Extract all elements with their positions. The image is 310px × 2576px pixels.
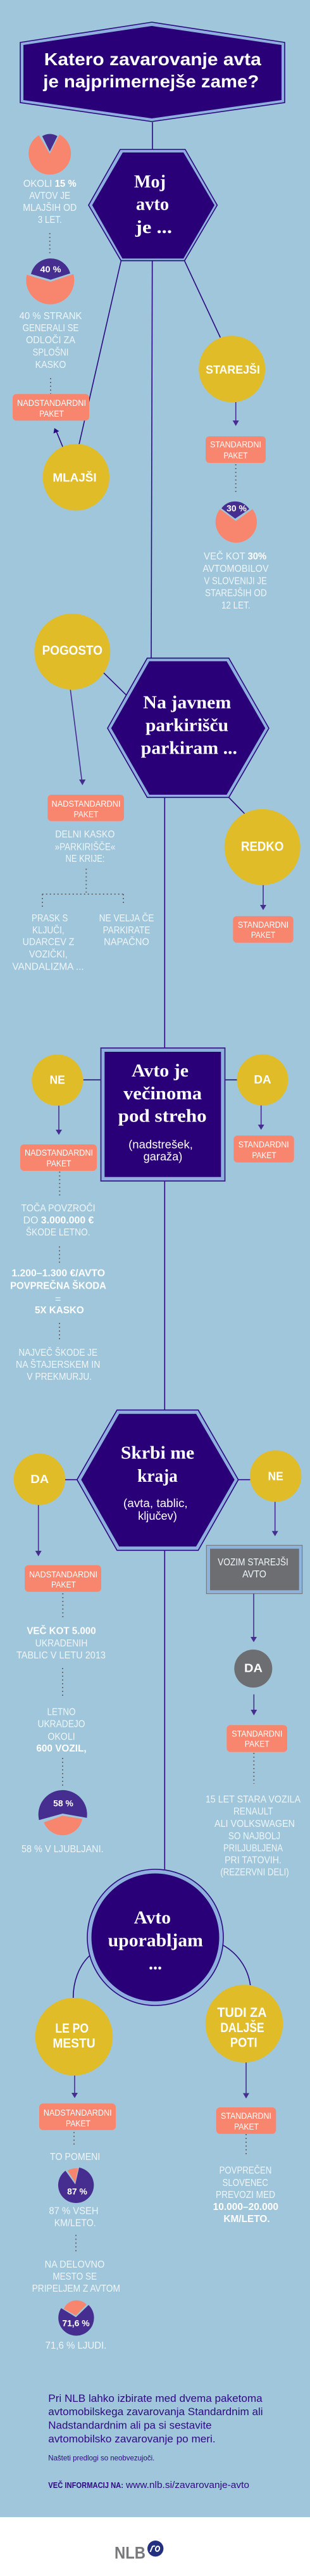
rectangle: avto je večinoma pod streho: večinoma [123, 1083, 202, 1104]
text: povprečna škoda: 5X KASKO [35, 1305, 84, 1316]
text: povprečen slovenec: KM/LETO. [223, 2214, 270, 2225]
text: ukradene tablice: VEČ KOT 5.000 [27, 1625, 96, 1637]
package badge: nadstandardni: NADSTANDARDNI [29, 1569, 97, 1579]
circle: starejši: STAREJŠI [206, 363, 260, 376]
pie chart: 30 % [216, 502, 257, 543]
package badge: nadstandardni: NADSTANDARDNI [25, 1147, 93, 1158]
dotted link [73, 2132, 75, 2146]
hexagon: moj avto je: je ... [135, 217, 172, 237]
package badge: nadstandardni: PAKET [73, 809, 99, 819]
circle: starejši [199, 336, 265, 402]
circle: da: DA [254, 1073, 271, 1086]
text: 87 % vseh km/leto [49, 2206, 99, 2229]
text: na delovno mesto: MESTO SE [53, 2271, 97, 2282]
hexagon: moj avto je [89, 149, 217, 261]
circle: mlajši: MLAJŠI [53, 471, 97, 484]
package badge: standardni [233, 916, 294, 943]
package badge: standardni: STANDARDNI [238, 919, 288, 930]
hexagon: na javnem parkirišču: parkiram ... [141, 738, 237, 758]
text: največ škode: NAJVEČ ŠKODE JE [18, 1346, 97, 1358]
text: 30 % older cars: V SLOVENIJI JE [204, 576, 267, 587]
text: letno ukradejo: UKRADEJO [38, 1719, 85, 1729]
text: največ škode [16, 1346, 100, 1382]
text: 15 % of cars: OKOLI 15 % [23, 179, 77, 189]
text: 15 % of cars [23, 179, 77, 225]
package badge: standardni: PAKET [234, 2121, 259, 2131]
dotted link [245, 2134, 247, 2156]
text: 40 % generali: GENERALI SE [23, 323, 78, 334]
text: 30 % older cars [202, 550, 269, 611]
hexagon: skrbi me kraja: ključev) [138, 1510, 177, 1522]
package badge: nadstandardni [20, 1144, 97, 1171]
circle: ne: NE [50, 1074, 65, 1087]
text: letno ukradejo [36, 1707, 87, 1754]
closing text: Našteti predlogi so neobvezujoči. [48, 2454, 154, 2463]
text: največ škode: V PREKMURJU. [27, 1372, 92, 1382]
package badge: nadstandardni: PAKET [51, 1579, 76, 1589]
text: 40 % generali [19, 311, 82, 370]
text: povprečen slovenec: POVPREČEN [220, 2164, 271, 2176]
connector lines [65, 122, 251, 1998]
text: največ škode: NA ŠTAJERSKEM IN [16, 1358, 100, 1370]
package badge: standardni: PAKET [251, 930, 276, 940]
pie chart: 58 %: 58 % [53, 1798, 73, 1809]
text: toča: ŠKODE LETNO. [26, 1226, 90, 1238]
pie chart: 40 % [26, 258, 74, 305]
text: letno ukradejo: OKOLI [47, 1731, 75, 1742]
arrow: redko to package [260, 885, 266, 910]
circle: mlajši [43, 444, 109, 510]
text: prask s ključi [12, 913, 84, 973]
dotted link [235, 464, 237, 492]
circle: pogosto: POGOSTO [42, 643, 102, 658]
pie chart: 30 %: 30 % [226, 503, 247, 514]
text: letno ukradejo: 600 VOZIL, [36, 1743, 87, 1754]
text: povprečna škoda [10, 1268, 106, 1316]
closing text: Pri NLB lahko izbirate med dvema paketoma [48, 2392, 263, 2404]
dotted link [59, 1171, 60, 1196]
package badge: standardni: PAKET [245, 1739, 270, 1749]
circle: redko: REDKO [241, 839, 283, 854]
package badge: standardni: PAKET [252, 1150, 276, 1160]
text: toča [21, 1202, 96, 1238]
text: prask s ključi: KLJUČI, [32, 924, 65, 936]
dotted link [49, 233, 51, 254]
dotted link [253, 1753, 254, 1784]
package badge: nadstandardni [47, 795, 124, 821]
pie chart: 71,6 % [58, 2301, 94, 2335]
package badge: nadstandardni: NADSTANDARDNI [17, 398, 86, 408]
text: povprečen slovenec [213, 2164, 278, 2225]
circle: redko [225, 809, 301, 885]
text: to pomeni: TO POMENI [50, 2152, 100, 2162]
rectangle: avto je večinoma pod streho: garaža) [144, 1151, 182, 1163]
circle: tudi za daljše poti: POTI [230, 2036, 257, 2050]
package badge: nadstandardni: PAKET [66, 2118, 90, 2128]
text: 15 let stara vozila: (REZERVNI DELI) [220, 1867, 289, 1878]
text: delni kasko: NE KRIJE: [66, 854, 105, 864]
arrow: da to package [258, 1106, 264, 1130]
hexagon: skrbi me kraja: Skrbi me [121, 1443, 194, 1463]
text: delni kasko: DELNI KASKO [55, 830, 115, 840]
rectangle: avto je večinoma pod streho: pod streho [118, 1106, 207, 1127]
circle: le po mestu [35, 1998, 113, 2076]
circle: le po mestu: LE PO [55, 2021, 89, 2036]
text: delni kasko: »PARKIRIŠČE« [55, 840, 115, 852]
text: 87 % vseh km/leto: 87 % VSEH [49, 2206, 99, 2217]
text: 15 let stara vozila: 15 LET STARA VOZILA [206, 1795, 301, 1805]
pie chart: 71,6 %: 71,6 % [62, 2318, 90, 2328]
text: ukradene tablice: TABLIC V LETU 2013 [16, 1650, 106, 1661]
hexagon: skrbi me kraja: kraja [137, 1466, 178, 1486]
text: povprečna škoda: 1.200–1.300 €/AVTO [11, 1268, 105, 1279]
box: vozim starejši avto: VOZIM STAREJŠI [218, 1556, 288, 1568]
package badge: nadstandardni [25, 1565, 101, 1592]
circle: tudi za daljše poti: TUDI ZA [217, 2005, 267, 2020]
text: 15 let stara vozila: PRI TATOVIH. [225, 1855, 282, 1866]
text: ukradene tablice [16, 1625, 106, 1661]
text: delni kasko [55, 830, 115, 864]
arrow: tudi za daljše poti to package [243, 2062, 249, 2099]
arrow: le po mestu to package [71, 2076, 78, 2098]
hexagon: na javnem parkirišču: parkirišču [146, 715, 228, 735]
text: 15 let stara vozila: SO NAJBOLJ [228, 1831, 280, 1842]
rectangle: avto je večinoma pod streho: (nadstrešek, [128, 1138, 193, 1151]
text: 40 % generali: KASKO [35, 360, 66, 370]
circle: grey da [234, 1650, 272, 1688]
package badge: nadstandardni: PAKET [39, 408, 64, 419]
text: letno ukradejo: LETNO [47, 1707, 76, 1717]
circle: avto uporabljam [87, 1869, 223, 2005]
text: povprečen slovenec: PREVOZI MED [216, 2190, 275, 2200]
circle: le po mestu: MESTU [53, 2036, 96, 2051]
pie chart: 40 %: 40 % [40, 264, 61, 274]
package badge: standardni: PAKET [224, 450, 248, 460]
title hexagon: Katero zavarovanje avta [44, 49, 261, 69]
text: prask s ključi: UDARCEV Z [23, 937, 75, 948]
package badge: standardni: STANDARDNI [221, 2111, 271, 2121]
closing text: avtomobilsko zavarovanje po meri. [48, 2433, 216, 2445]
hexagon: moj avto je: avto [136, 194, 169, 215]
dotted link [62, 1593, 63, 1617]
text: toča: DO 3.000.000 € [23, 1215, 94, 1226]
arrow: pogosto to package [70, 690, 85, 785]
arrow: ne to vozim starejši avto [272, 1502, 278, 1536]
text: 87 % vseh km/leto: KM/LETO. [54, 2218, 96, 2229]
circle: ne: NE [268, 1470, 283, 1482]
text: ne velja če [99, 912, 154, 948]
box: vozim starejši avto [206, 1545, 302, 1594]
text: 30 % older cars: VEČ KOT 30% [204, 550, 266, 562]
package badge: standardni: STANDARDNI [232, 1729, 282, 1739]
rectangle: avto je večinoma pod streho [101, 1048, 225, 1181]
dotted link [62, 1668, 63, 1697]
arrow: da to package [251, 1695, 257, 1715]
closing text: VEČ INFORMACIJ NA: [48, 2480, 123, 2490]
circle: ne [32, 1054, 83, 1106]
package badge: nadstandardni: NADSTANDARDNI [52, 799, 120, 809]
circle: da: DA [30, 1473, 49, 1486]
pie chart: 87 % [58, 2168, 94, 2203]
hexagon: skrbi me kraja: (avta, tablic, [123, 1497, 188, 1510]
logo: NLB [115, 2541, 163, 2562]
dotted link [62, 1758, 63, 1788]
text: 15 let stara vozila: ALI VOLKSWAGEN [214, 1819, 295, 1829]
text: ne velja če: NAPAČNO [104, 936, 149, 948]
circle: ne [250, 1450, 301, 1502]
dotted link [59, 1246, 60, 1263]
package badge: standardni [206, 436, 266, 463]
circle: tudi za daljše poti [206, 1985, 283, 2062]
package badge: standardni: STANDARDNI [210, 439, 261, 450]
package badge: nadstandardni [13, 394, 89, 420]
package badge: standardni [233, 1135, 294, 1163]
package badge: nadstandardni: NADSTANDARDNI [44, 2107, 112, 2118]
text: 15 % of cars: MLAJŠIH OD [23, 201, 77, 213]
text: prask s ključi: VOZIČKI, [29, 948, 68, 960]
closing text: Nadstandardnim ali pa si sestavite [48, 2420, 212, 2432]
circle: pogosto [34, 614, 110, 690]
circle: da [237, 1054, 288, 1106]
circle: grey da: DA [244, 1662, 263, 1675]
package badge: nadstandardni [39, 2104, 116, 2130]
text: 40 % generali: 40 % STRANK [19, 311, 82, 322]
closing text: avtomobilskega zavarovanja Standardnim ali [48, 2406, 263, 2418]
text: na delovno mesto: NA DELOVNO [45, 2259, 104, 2270]
package badge: standardni: STANDARDNI [239, 1139, 289, 1149]
arrow: mlajši to package [53, 428, 63, 447]
dotted link [59, 1323, 60, 1339]
text: 30 % older cars: STAREJŠIH OD [205, 587, 267, 599]
circle: da [14, 1453, 65, 1505]
text: 71,6 % ljudi: 71,6 % LJUDI. [46, 2340, 106, 2351]
text: 15 let stara vozila: RENAULT [233, 1807, 273, 1817]
text: povprečen slovenec: SLOVENEC [223, 2178, 268, 2188]
circle: tudi za daljše poti: DALJŠE [220, 2020, 264, 2035]
title hexagon [20, 22, 285, 122]
text: 30 % older cars: 12 LET. [221, 600, 251, 611]
text: 15 let stara vozila [206, 1795, 301, 1878]
hexagon: moj avto je: Moj [134, 172, 166, 192]
circle: avto uporabljam: Avto [134, 1907, 171, 1928]
package badge: standardni [226, 1725, 287, 1752]
arrow: ne to package [56, 1106, 62, 1135]
hexagon: na javnem parkirišču: Na javnem [143, 692, 231, 712]
arrow: starejši to package [233, 402, 239, 426]
hexagon: skrbi me kraja [77, 1410, 239, 1550]
text: na delovno mesto: PRIPELJEM Z AVTOM [32, 2283, 120, 2294]
circle: avto uporabljam: ... [149, 1954, 162, 1974]
box: vozim starejši avto: AVTO [242, 1569, 266, 1580]
text: 15 % of cars: AVTOV JE [29, 191, 70, 201]
text: prask s ključi: PRASK S [32, 913, 68, 924]
text: 15 let stara vozila: PRILJUBLJENA [223, 1843, 283, 1854]
hexagon: na javnem parkirišču [108, 658, 269, 797]
logo: NLB: NLB [115, 2543, 146, 2562]
arrow: box to da [251, 1594, 257, 1642]
pie chart: 15 % [28, 134, 71, 175]
text: toča: TOČA POVZROČI [21, 1202, 96, 1214]
text: ukradene tablice: UKRADENIH [35, 1638, 87, 1649]
text: 40 % generali: SPLOŠNI [33, 346, 68, 358]
package badge: standardni [216, 2107, 276, 2134]
text: 15 % of cars: 3 LET. [38, 215, 62, 225]
text: na delovno mesto [32, 2259, 120, 2294]
text: ne velja če: NE VELJA ČE [99, 912, 154, 924]
text: povprečna škoda: POVPREČNA ŠKODA [10, 1280, 106, 1292]
title hexagon: je najprimernejše zame? [42, 72, 259, 91]
pie chart: 87 %: 87 % [67, 2187, 87, 2197]
circle: avto uporabljam: uporabljam [108, 1930, 203, 1950]
arrow: da to package [35, 1505, 42, 1556]
text: prask s ključi: VANDALIZMA ... [12, 962, 84, 973]
text: 58 % v ljubljani: 58 % V LJUBLJANI. [22, 1844, 104, 1855]
rectangle: avto je večinoma pod streho: Avto je [132, 1061, 189, 1081]
closing text: www.nlb.si/zavarovanje-avto [125, 2480, 249, 2491]
text: ne velja če: PARKIRATE [103, 925, 150, 936]
text: 40 % generali: ODLOČI ZA [26, 334, 75, 346]
dotted tree [42, 869, 123, 907]
package badge: nadstandardni: PAKET [47, 1158, 71, 1168]
dotted link [75, 2235, 77, 2252]
closing text [48, 2392, 263, 2491]
text: 30 % older cars: AVTOMOBILOV [202, 564, 269, 574]
text: povprečen slovenec: 10.000–20.000 [213, 2202, 278, 2213]
text: povprečna škoda: = [55, 1294, 61, 1304]
pie chart: 58 % [39, 1790, 87, 1835]
dotted link [50, 378, 51, 394]
